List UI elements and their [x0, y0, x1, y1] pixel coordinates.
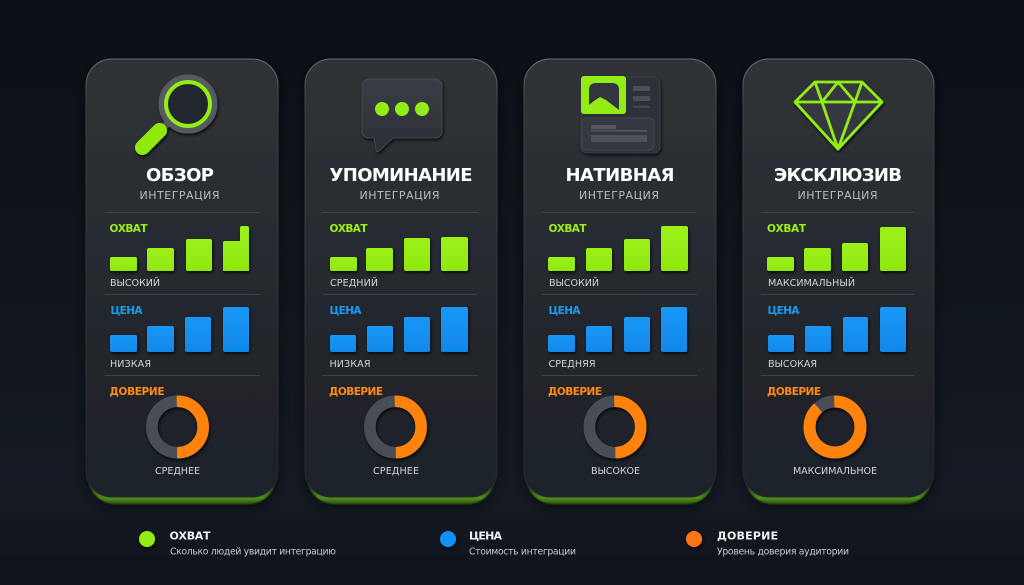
price value: НИЗКАЯ	[110, 359, 151, 370]
bar chart: price	[110, 307, 249, 352]
subtitle: ИНТЕГРАЦИЯ	[798, 189, 878, 202]
trust heading: ДОВЕРИЕ	[548, 386, 602, 398]
legend item: reach	[139, 530, 336, 558]
trust value: МАКСИМАЛЬНОЕ	[793, 466, 877, 477]
legend item: trust: Уровень доверия аудитории	[717, 546, 849, 558]
reach heading: ОХВАТ	[548, 223, 587, 235]
bar chart: reach	[548, 226, 688, 271]
bar chart: price	[548, 307, 687, 352]
card base: обзор	[86, 59, 278, 504]
panel: обзор	[86, 59, 278, 504]
price value: НИЗКАЯ	[330, 359, 370, 370]
reach heading: ОХВАТ	[330, 223, 368, 235]
bar chart: reach	[110, 226, 249, 271]
trust value: СРЕДНЕЕ	[155, 466, 200, 477]
trust value: СРЕДНЕЕ	[373, 466, 419, 477]
subtitle: ИНТЕГРАЦИЯ	[579, 189, 659, 202]
icon: native article	[581, 76, 660, 153]
card base: эксклюзив	[743, 59, 934, 504]
icon: magnifier	[142, 78, 214, 148]
price heading: ЦЕНА	[548, 305, 581, 317]
trust heading: ДОВЕРИЕ	[110, 386, 164, 398]
price value: ВЫСОКАЯ	[768, 359, 817, 370]
bar chart: reach	[767, 227, 906, 271]
price heading: ЦЕНА	[768, 305, 800, 317]
legend item: trust	[686, 530, 849, 558]
title: УПОМИНАНИЕ	[330, 165, 472, 186]
card base: упоминание	[305, 59, 497, 504]
card base: нативная	[524, 59, 716, 504]
reach value: СРЕДНИЙ	[330, 276, 378, 289]
panel: эксклюзив	[743, 59, 934, 504]
reach heading: ОХВАТ	[767, 223, 807, 235]
legend item: price: ЦЕНА	[469, 530, 502, 542]
subtitle: ИНТЕГРАЦИЯ	[360, 189, 440, 202]
donut chart: trust	[152, 401, 203, 453]
donut chart: trust	[810, 402, 860, 452]
legend	[139, 530, 849, 558]
trust heading: ДОВЕРИЕ	[329, 386, 383, 398]
price heading: ЦЕНА	[330, 305, 362, 317]
price heading: ЦЕНА	[110, 305, 143, 317]
trust value: ВЫСОКОЕ	[591, 466, 640, 477]
reach value: ВЫСОКИЙ	[110, 276, 160, 289]
bar chart: reach	[330, 237, 468, 271]
panel: упоминание	[305, 59, 497, 504]
reach heading: ОХВАТ	[110, 223, 148, 235]
title: НАТИВНАЯ	[566, 165, 674, 186]
title: ОБЗОР	[146, 165, 214, 186]
subtitle: ИНТЕГРАЦИЯ	[140, 189, 220, 202]
legend item: trust: ДОВЕРИЕ	[717, 530, 778, 542]
icon: speech bubble	[362, 79, 442, 152]
panel: нативная	[524, 59, 716, 504]
legend item: price	[440, 530, 576, 558]
bar chart: price	[330, 307, 468, 352]
reach value: ВЫСОКИЙ	[549, 276, 599, 289]
icon: diamond	[795, 82, 882, 149]
trust heading: ДОВЕРИЕ	[767, 386, 821, 398]
title: ЭКСКЛЮЗИВ	[774, 165, 902, 186]
donut chart: trust	[589, 401, 641, 453]
legend item: price: Стоимость интеграции	[469, 546, 576, 558]
price value: СРЕДНЯЯ	[548, 359, 596, 370]
reach value: МАКСИМАЛЬНЫЙ	[768, 276, 855, 289]
legend item: reach: ОХВАТ	[170, 530, 211, 542]
bar chart: price	[768, 307, 906, 352]
donut chart: trust	[370, 401, 421, 453]
legend item: reach: Сколько людей увидит интеграцию	[170, 546, 336, 558]
